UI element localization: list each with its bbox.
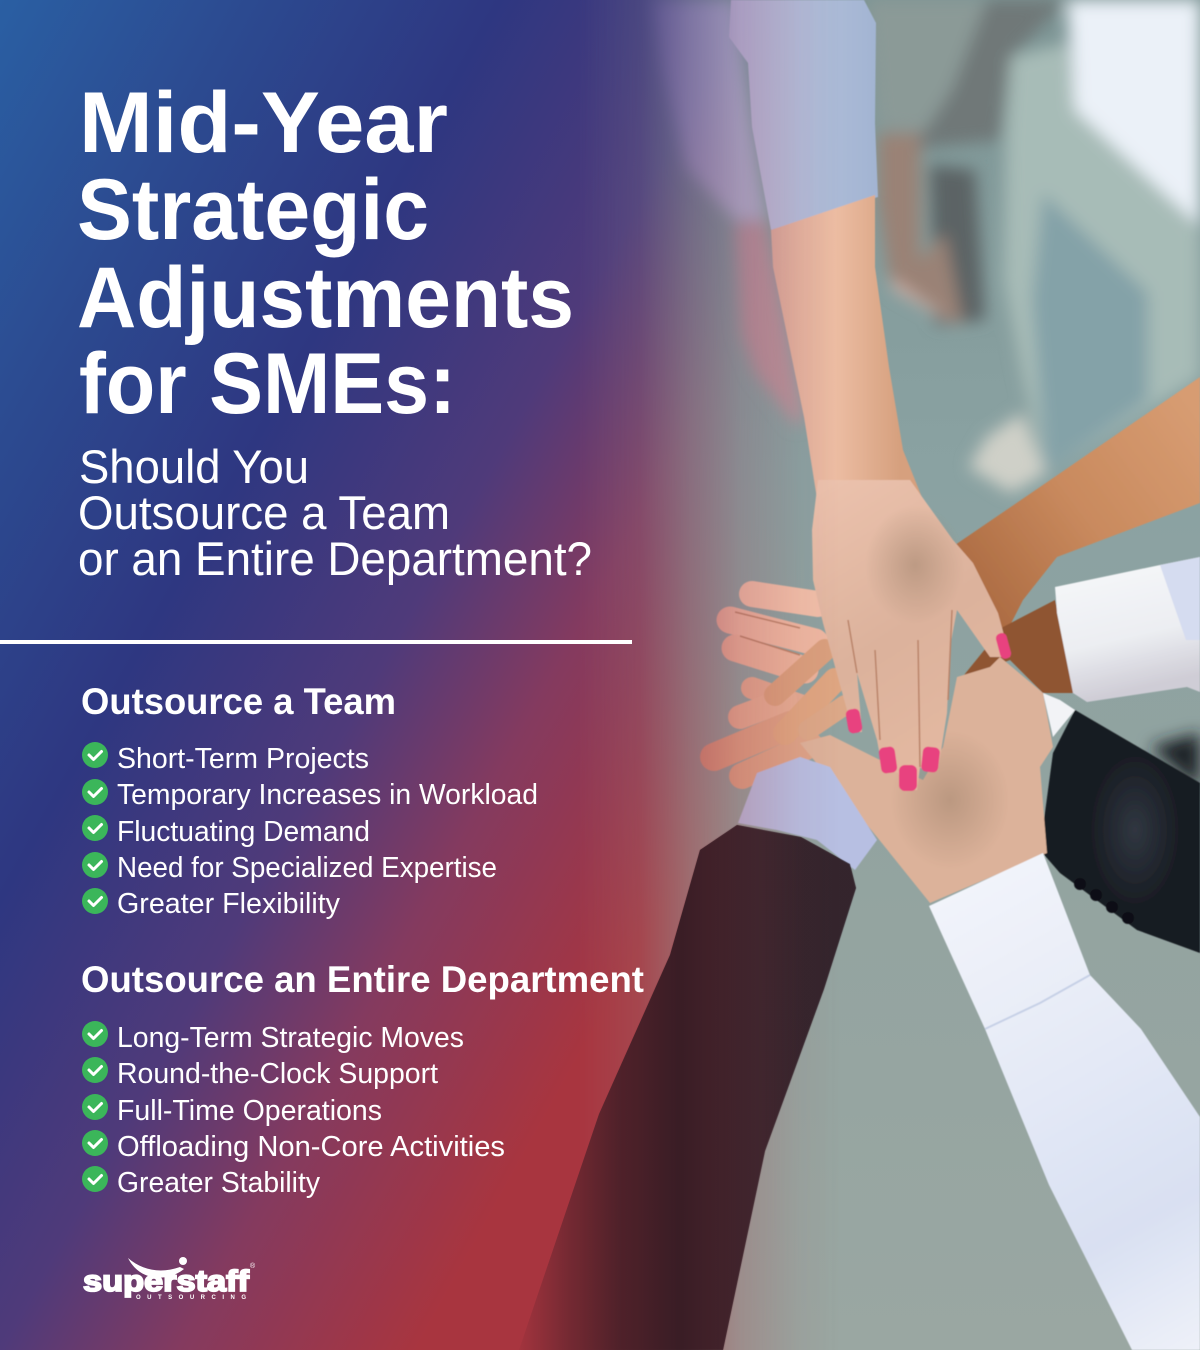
subtitle: or an Entire Department? bbox=[78, 532, 592, 585]
checklist: department reasons: Long-Term Strategic Moves bbox=[117, 1022, 464, 1054]
small white cuff by suit bbox=[1043, 693, 1075, 737]
title bbox=[77, 75, 574, 432]
title: Adjustments bbox=[77, 250, 574, 346]
dark suit right bbox=[1040, 710, 1200, 953]
hand back shading bbox=[865, 505, 965, 625]
lower left finger stack bbox=[714, 594, 818, 776]
checklist: team reasons: Temporary Increases in Workload bbox=[117, 779, 538, 811]
jacket buttons bbox=[1074, 878, 1134, 924]
checklist: team reasons: Greater Flexibility bbox=[117, 888, 340, 920]
title: for SMEs: bbox=[79, 336, 456, 432]
sleeve crease bbox=[985, 975, 1090, 1029]
background people, out of focus bbox=[650, 0, 1200, 790]
finger separations bbox=[735, 610, 952, 767]
dark jacket visible through overlay bbox=[519, 825, 856, 1350]
subtitle: Should You bbox=[79, 440, 309, 493]
logo swoosh and dot bbox=[128, 1257, 187, 1278]
checklist: team reasons: Short-Term Projects bbox=[117, 743, 369, 775]
divider line bbox=[0, 640, 632, 644]
checklist: department reasons bbox=[82, 1021, 505, 1199]
logo tagline: OUTSOURCING bbox=[136, 1295, 246, 1301]
title: Mid-Year bbox=[79, 75, 448, 171]
subtitle bbox=[78, 440, 592, 585]
foreground arms and hands bbox=[519, 0, 1200, 1350]
subtitle: Outsource a Team bbox=[78, 486, 450, 539]
cuff blue fold bbox=[1160, 557, 1200, 640]
upper blue sleeve bbox=[729, 0, 878, 230]
logo wordmark: superstaff bbox=[83, 1265, 250, 1298]
white right cuff bbox=[1055, 557, 1200, 702]
lower right hand bbox=[800, 657, 1053, 903]
title: Strategic bbox=[77, 162, 429, 258]
panel: outsource a team bbox=[81, 681, 538, 920]
checklist: team reasons: Need for Specialized Expertise bbox=[117, 852, 497, 884]
heading: outsource a team: Outsource a Team bbox=[81, 681, 396, 722]
hand shadow bbox=[890, 730, 1010, 870]
checklist: department reasons: Full-Time Operations bbox=[117, 1095, 382, 1127]
light blue cuff bbox=[738, 757, 877, 870]
logo: superstaff outsourcing bbox=[83, 1257, 256, 1301]
dark forearm bbox=[960, 600, 1077, 693]
upper right forearm bbox=[955, 377, 1200, 645]
central forearm bbox=[771, 195, 925, 505]
dark suit left bbox=[519, 825, 856, 1350]
top hand bbox=[812, 480, 1010, 790]
heading: outsource an entire department: Outsource an Entire Department bbox=[81, 959, 644, 1000]
checklist: department reasons: Greater Stability bbox=[117, 1167, 320, 1199]
checklist: team reasons: Fluctuating Demand bbox=[117, 816, 370, 848]
panel: outsource an entire department bbox=[81, 959, 644, 1199]
registered mark: ® bbox=[250, 1262, 256, 1270]
pink nails bbox=[845, 632, 1012, 791]
white lower sleeve bbox=[929, 853, 1200, 1350]
upper hand orange fingers bbox=[775, 650, 845, 733]
checklist: team reasons bbox=[82, 742, 538, 920]
suit sheen bbox=[1085, 745, 1185, 915]
checklist: department reasons: Round-the-Clock Support bbox=[117, 1058, 438, 1090]
checklist: department reasons: Offloading Non-Core Activities bbox=[117, 1131, 505, 1163]
gradient colour overlay bbox=[0, 0, 801, 1350]
